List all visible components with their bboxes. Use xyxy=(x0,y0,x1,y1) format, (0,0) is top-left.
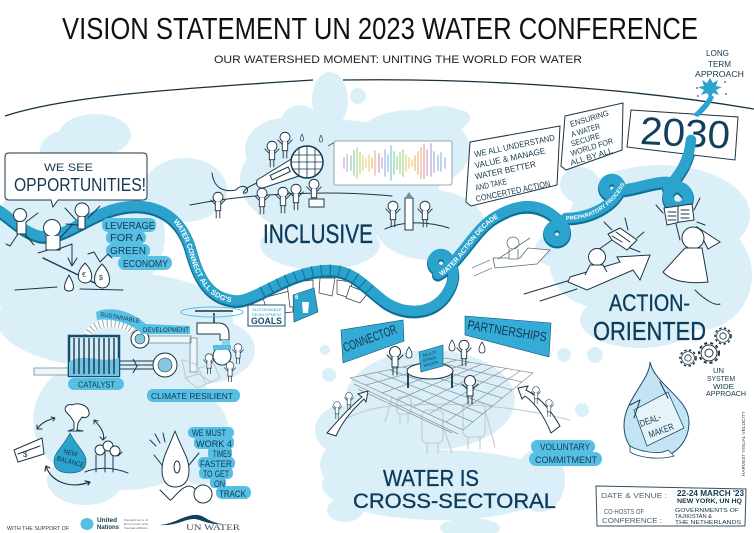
note: ensuring water secure world: ENSURING xyxy=(569,109,610,129)
icon: people with pencil xyxy=(385,192,449,230)
catalyst grate xyxy=(69,336,119,376)
footer: support logos: United xyxy=(97,518,117,524)
label: long term approach: APPROACH xyxy=(695,70,744,79)
note: ensuring water secure world: WORLD FOR xyxy=(569,136,614,158)
heading: inclusive: INCLUSIVE xyxy=(263,219,373,249)
icon: SDG logo box xyxy=(248,305,285,326)
sustainable development label xyxy=(96,309,190,334)
icon: SDG logo box: GOALS xyxy=(251,316,282,326)
label: long term approach: TERM xyxy=(708,60,731,69)
label: voluntary commitment: COMMITMENT xyxy=(535,455,597,466)
person right xyxy=(65,203,100,229)
callout text: we must work 4 times faster: FASTER xyxy=(200,459,232,469)
icon: person with open book on arrow xyxy=(524,218,650,301)
ribbon label: water connect all SDGs: WATER CONNECT ALL SDG'S xyxy=(174,218,232,302)
UN emblem xyxy=(80,518,94,530)
heading: water is cross-sectoral xyxy=(353,465,556,513)
speech bubble: we see opportunities: WE SEE xyxy=(44,162,93,174)
arrow: people climbing right xyxy=(518,386,560,433)
heading: action-oriented: ORIENTED xyxy=(593,316,706,346)
multi stakeholder table: STAKE- xyxy=(422,354,438,363)
people celebrating on ribbon xyxy=(6,203,100,266)
ribbon label: water action decade: WATER ACTION DECADE xyxy=(438,214,498,276)
label: climate resilient: CLIMATE RESILIENT xyxy=(151,391,233,401)
box: date and venue: CO-HOSTS OF xyxy=(604,509,644,516)
panel: new balance cycle xyxy=(14,404,128,485)
note: ensuring water secure world: A WATER xyxy=(570,122,601,139)
banner: connector xyxy=(341,320,404,363)
note: we all understand value: AND TAKE xyxy=(474,176,508,193)
box: date and venue: TAJIKISTAN & xyxy=(675,514,712,520)
callout text: we must work 4 times faster: WORK 4 xyxy=(196,439,232,449)
icon: SDG 6 flag xyxy=(293,288,318,322)
banner: connector: CONNECTOR xyxy=(341,322,399,355)
speech bubble: we see opportunities: OPPORTUNITIES! xyxy=(14,175,146,195)
callout text: we must work 4 times faster: ON xyxy=(214,479,225,489)
label: UN system wide approach: WIDE xyxy=(713,382,734,391)
callout text: we must work 4 times faster xyxy=(188,427,251,499)
box: date and venue: 22-24 MARCH '23 xyxy=(677,489,745,498)
sustainable development label: SUSTAINABLE xyxy=(100,312,140,325)
tree xyxy=(65,404,89,431)
ribbon end over banner xyxy=(684,140,691,166)
note: we all understand value: VALUE & MANAGE xyxy=(474,146,546,170)
callout: leverage for a green economy: ECONOMY xyxy=(123,259,168,270)
book with rays xyxy=(608,228,637,250)
footer: support logos: WITH THE SUPPORT OF xyxy=(7,526,70,532)
label: climate resilient xyxy=(147,389,240,402)
footer: support logos: Economic and xyxy=(124,522,149,526)
sound wave panel xyxy=(334,141,452,185)
hanging papers behind ribbon xyxy=(263,278,368,314)
box: date and venue: THE NETHERLANDS xyxy=(675,520,741,526)
people group xyxy=(85,441,128,473)
icon: person with book under ribbon xyxy=(656,198,720,304)
ground curve xyxy=(343,404,570,420)
footer: support logos: UN WATER xyxy=(186,523,241,532)
icon: SDG logo box: SUSTAINABLE xyxy=(252,308,283,312)
box: date and venue: CONFERENCE : xyxy=(602,516,662,525)
icon: SDG 6 flag: 6 xyxy=(295,295,299,301)
heading: action-oriented: ACTION- xyxy=(609,290,690,317)
box: date and venue: GOVERNMENTS OF xyxy=(675,508,740,514)
panel: water infrastructure pipes xyxy=(34,307,244,388)
callout text: we must work 4 times faster: TIMES xyxy=(213,449,231,459)
ribbon ridges xyxy=(262,270,375,295)
callout: leverage for a green economy: FOR A xyxy=(110,233,143,244)
new balance drop: BALANCE xyxy=(56,456,85,470)
icon: deal-maker drop: DEAL- xyxy=(638,412,663,430)
heading: water is cross-sectoral: CROSS-SECTORAL xyxy=(353,490,556,513)
box: date and venue: DATE & VENUE : xyxy=(601,491,667,500)
footer: support logos xyxy=(7,515,241,532)
label: UN system wide approach: APPROACH xyxy=(706,389,746,398)
icon: UN system gears xyxy=(680,328,731,366)
person left xyxy=(6,208,38,246)
subtitle: OUR WATERSHED MOMENT: UNITING THE WORLD FOR WATER xyxy=(214,54,582,66)
ribbon body xyxy=(0,140,691,311)
note: we all understand value xyxy=(466,126,565,206)
box: date and venue: NEW YORK, UN HQ xyxy=(677,498,742,505)
banner: partnerships xyxy=(465,316,551,357)
panel: connected sectors grid xyxy=(343,340,570,454)
speed lines xyxy=(524,279,577,301)
multi stakeholder table: MULTI xyxy=(422,350,437,358)
callout text: we must work 4 times faster: TRACK xyxy=(219,489,246,499)
icon: balance with money bags: € xyxy=(82,272,86,279)
grey sector figures xyxy=(385,397,495,454)
ribbon dark edge xyxy=(0,142,691,312)
label: voluntary commitment xyxy=(529,440,602,466)
footer: support logos: Department of xyxy=(124,518,148,522)
UN Water logo xyxy=(160,515,222,525)
label: UN system wide approach xyxy=(706,366,746,398)
note: we all understand value: WE ALL UNDERSTAND xyxy=(473,132,556,159)
heading: action-oriented xyxy=(593,290,706,346)
grid mesh xyxy=(350,358,533,434)
person centre xyxy=(38,220,77,266)
icon: microphone with cheering crowd xyxy=(190,132,392,218)
icon: deal-maker drop xyxy=(624,362,689,458)
panel: drop character and callout xyxy=(150,427,251,503)
drop character xyxy=(150,431,212,503)
callout: leverage for a green economy: LEVERAGE xyxy=(105,221,155,232)
note: we all understand value: WATER BETTER xyxy=(474,159,537,182)
new balance drop: NEW xyxy=(63,448,78,459)
box: date and venue xyxy=(596,486,746,526)
note: ensuring water secure world: ALL BY ALL xyxy=(569,146,615,168)
callout text: we must work 4 times faster: WE MUST xyxy=(192,428,226,438)
water pot with face xyxy=(213,345,231,365)
icon: SDG logo box: DEVELOPMENT xyxy=(252,313,283,317)
label: UN system wide approach: UN xyxy=(713,366,724,375)
note: ensuring water secure world xyxy=(558,103,623,170)
heading: water is cross-sectoral: WATER IS xyxy=(383,465,479,491)
icon: deal-maker drop: MAKER xyxy=(647,422,676,441)
label: catalyst xyxy=(68,378,124,390)
vertical credit: HARVEST VISUAL VELOCITY xyxy=(741,411,746,476)
footer: support logos: Nations xyxy=(97,525,120,531)
icon: balance with money bags: $ xyxy=(99,275,103,282)
label: catalyst: CATALYST xyxy=(78,380,115,390)
arrow xyxy=(568,255,650,290)
label: long term approach: LONG xyxy=(706,49,729,58)
multi stakeholder table: HOLDER xyxy=(423,359,439,368)
label: voluntary commitment: VOLUNTARY xyxy=(540,442,591,453)
water ribbon xyxy=(0,140,691,312)
ribbon label: preparatory process: PREPARATORY PROCESS xyxy=(566,182,624,220)
sustainable development label: DEVELOPMENT xyxy=(143,327,189,334)
label: UN system wide approach: SYSTEM xyxy=(707,374,735,383)
icon: kayaker xyxy=(472,237,550,276)
arrow: people climbing left xyxy=(327,391,368,436)
multi stakeholder table xyxy=(407,345,453,388)
new balance drop xyxy=(54,433,86,473)
speech bubble: we see opportunities xyxy=(5,153,147,207)
label: long term approach xyxy=(695,49,744,79)
banknotes: $ xyxy=(23,450,28,459)
callout text: we must work 4 times faster: TO GET xyxy=(203,469,229,479)
cycle arrows xyxy=(37,417,106,485)
horizon line xyxy=(5,80,754,116)
note: we all understand value: CONCERTED ACTION xyxy=(475,178,551,204)
callout: leverage for a green economy xyxy=(102,218,172,270)
faucet with propeller xyxy=(181,307,243,351)
callout: leverage for a green economy: GREEN xyxy=(110,246,146,257)
note: ensuring water secure world: SECURE xyxy=(570,131,601,149)
banner: partnerships: PARTNERSHIPS xyxy=(467,317,548,345)
icon: balance with money bags xyxy=(15,252,123,291)
banner: 2030: 2030 xyxy=(639,110,731,158)
footer: support logos: Social Affairs xyxy=(124,526,149,530)
icon: water spout splash xyxy=(693,78,727,117)
